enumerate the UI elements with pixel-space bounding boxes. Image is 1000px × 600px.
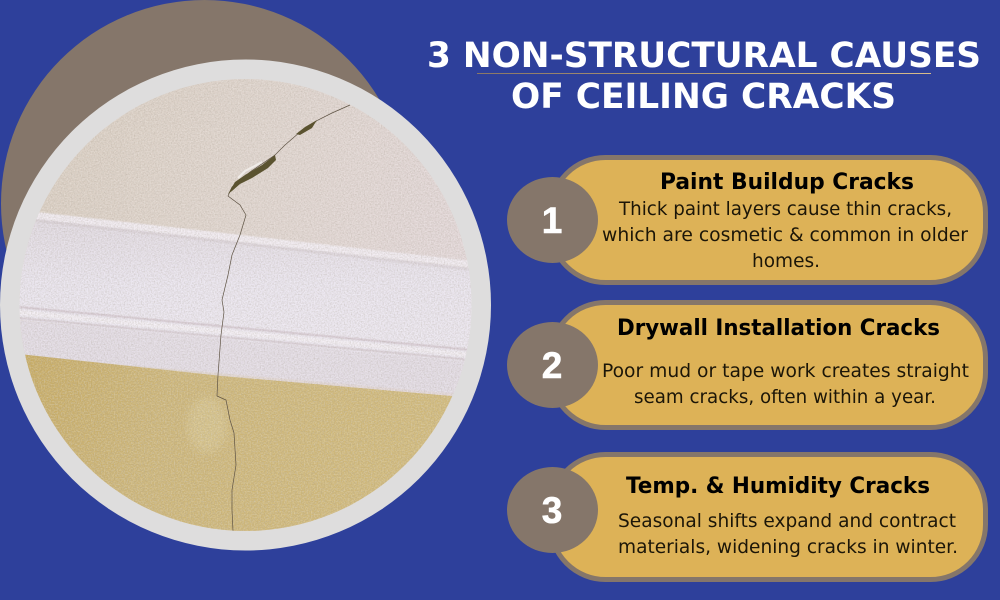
number badge 3: 3 — [542, 490, 562, 531]
description — [602, 198, 968, 272]
number badge 2 — [507, 322, 598, 408]
description: homes. — [752, 250, 820, 272]
panel: temp and humidity cracks — [507, 454, 986, 580]
pill background — [550, 158, 986, 282]
panel: drywall installation cracks — [507, 302, 986, 428]
description: seam cracks, often within a year. — [634, 386, 936, 408]
decorative brown circle — [1, 0, 408, 407]
title: OF CEILING CRACKS — [511, 77, 896, 117]
title: 3 NON-STRUCTURAL CAUSES — [427, 36, 981, 76]
number badge 1 — [507, 177, 598, 263]
pill background — [550, 454, 986, 580]
photo frame ring — [0, 60, 491, 550]
description — [602, 360, 969, 408]
description — [618, 510, 958, 558]
description: Poor mud or tape work creates straight — [602, 360, 969, 382]
heading: Paint Buildup Cracks — [660, 170, 914, 195]
number badge 1: 1 — [542, 200, 562, 241]
heading: Temp. & Humidity Cracks — [626, 474, 930, 499]
pill background — [550, 302, 986, 428]
description: Seasonal shifts expand and contract — [618, 510, 956, 532]
description: materials, widening cracks in winter. — [618, 536, 958, 558]
title underline rule — [477, 73, 931, 74]
number badge 3 — [507, 467, 598, 553]
title — [427, 36, 981, 117]
heading: Drywall Installation Cracks — [617, 316, 940, 341]
crack wide gaps — [228, 155, 276, 194]
number badge 2: 2 — [542, 345, 562, 386]
description: Thick paint layers cause thin cracks, — [618, 198, 952, 220]
description: which are cosmetic & common in older — [602, 224, 968, 246]
photo of ceiling crack — [19, 79, 472, 531]
photo: cracked ceiling in circular frame — [0, 60, 491, 550]
panel: paint buildup cracks — [507, 158, 986, 282]
crack line — [217, 105, 350, 531]
